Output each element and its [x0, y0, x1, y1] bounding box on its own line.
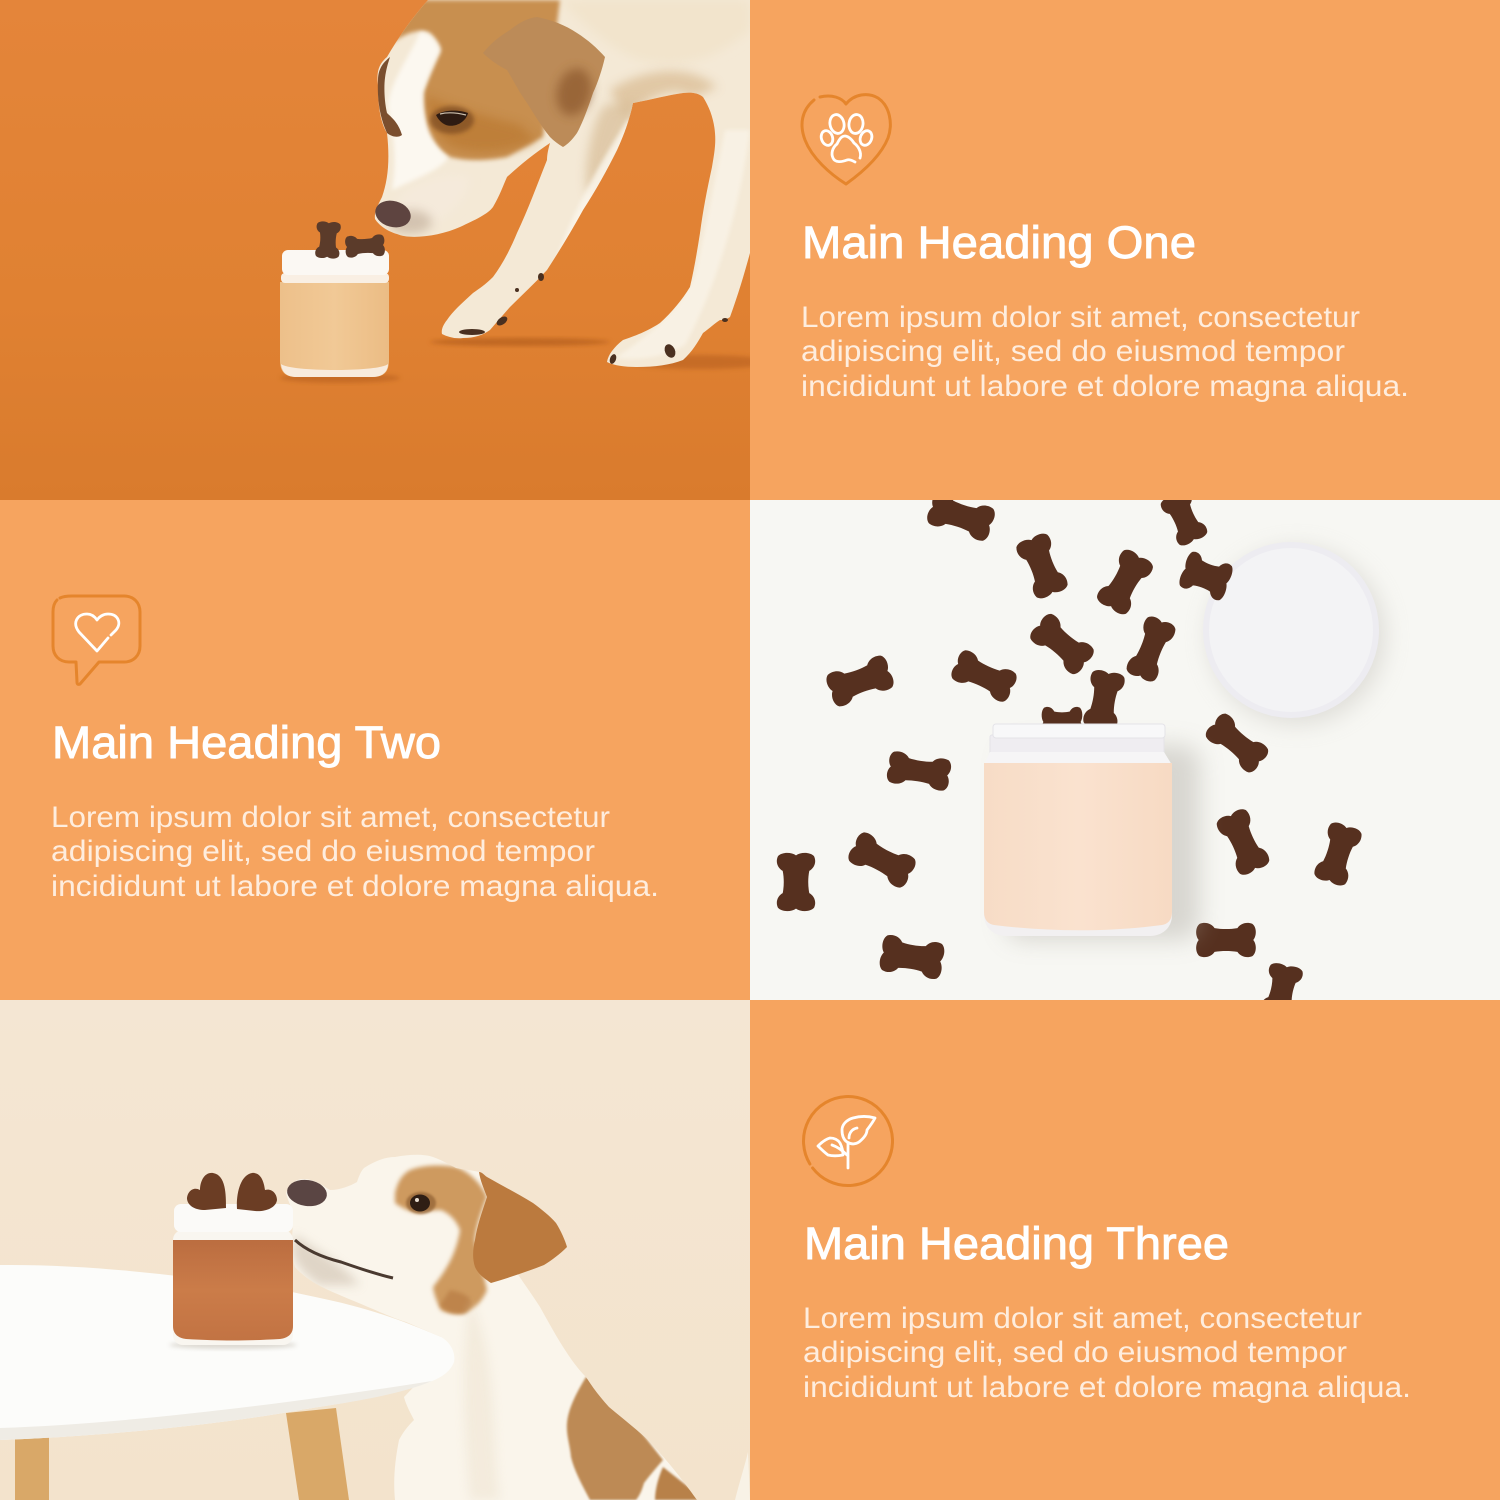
- text block two: [51, 801, 659, 903]
- heading three: Main Heading Three: [804, 1218, 1229, 1269]
- scattered treats: [777, 488, 1364, 1018]
- panel: photo of dog sniffing a jar on orange: [0, 0, 770, 500]
- dog toenails: [459, 273, 728, 365]
- icon: sprout in circle: [804, 1097, 893, 1186]
- table: [0, 1265, 454, 1500]
- dog eye: [430, 106, 474, 134]
- panel: photo of dog sniffing a jar on a table: [0, 1000, 750, 1500]
- lid: [1203, 542, 1385, 724]
- dog tail: [735, 1452, 750, 1500]
- text block three: [803, 1302, 1411, 1404]
- text block three: incididunt ut labore et dolore magna aliqua.: [803, 1371, 1411, 1404]
- dog eye: [406, 1192, 436, 1214]
- icon: speech bubble with heart: [53, 596, 140, 684]
- text block two: Lorem ipsum dolor sit amet, consectetur: [51, 801, 610, 834]
- text block one: [801, 301, 1409, 403]
- dog ear: [473, 1172, 567, 1283]
- heart treats: [187, 1173, 277, 1211]
- dog: [285, 1155, 705, 1500]
- panel: photo of scattered bone treats and jar: [750, 488, 1500, 1018]
- dog: [372, 0, 750, 367]
- text block one: adipiscing elit, sed do eiusmod tempor: [801, 335, 1345, 368]
- text block three: adipiscing elit, sed do eiusmod tempor: [803, 1336, 1347, 1369]
- jar: [984, 724, 1200, 940]
- dog nose: [375, 200, 411, 228]
- text block three: Lorem ipsum dolor sit amet, consectetur: [803, 1302, 1362, 1335]
- head tan markings: [385, 0, 560, 160]
- panel: text block one: [750, 0, 1500, 500]
- icon: heart with paw: [802, 95, 890, 184]
- dog left ear: [378, 57, 402, 137]
- jar: [280, 250, 389, 377]
- text block two: adipiscing elit, sed do eiusmod tempor: [51, 835, 595, 868]
- dog mouth: [295, 1240, 393, 1278]
- text block one: incididunt ut labore et dolore magna aliqua.: [801, 370, 1409, 403]
- jar treats: [315, 221, 385, 259]
- panel: text block three: [750, 1000, 1500, 1500]
- dog ear: [483, 17, 605, 147]
- text block two: incididunt ut labore et dolore magna aliqua.: [51, 870, 659, 903]
- dog nose: [287, 1180, 327, 1206]
- heading two: Main Heading Two: [52, 717, 441, 768]
- text block one: Lorem ipsum dolor sit amet, consectetur: [801, 301, 1360, 334]
- heading one: Main Heading One: [802, 217, 1196, 268]
- panel: text block two: [0, 500, 750, 1000]
- jar: [169, 1204, 297, 1349]
